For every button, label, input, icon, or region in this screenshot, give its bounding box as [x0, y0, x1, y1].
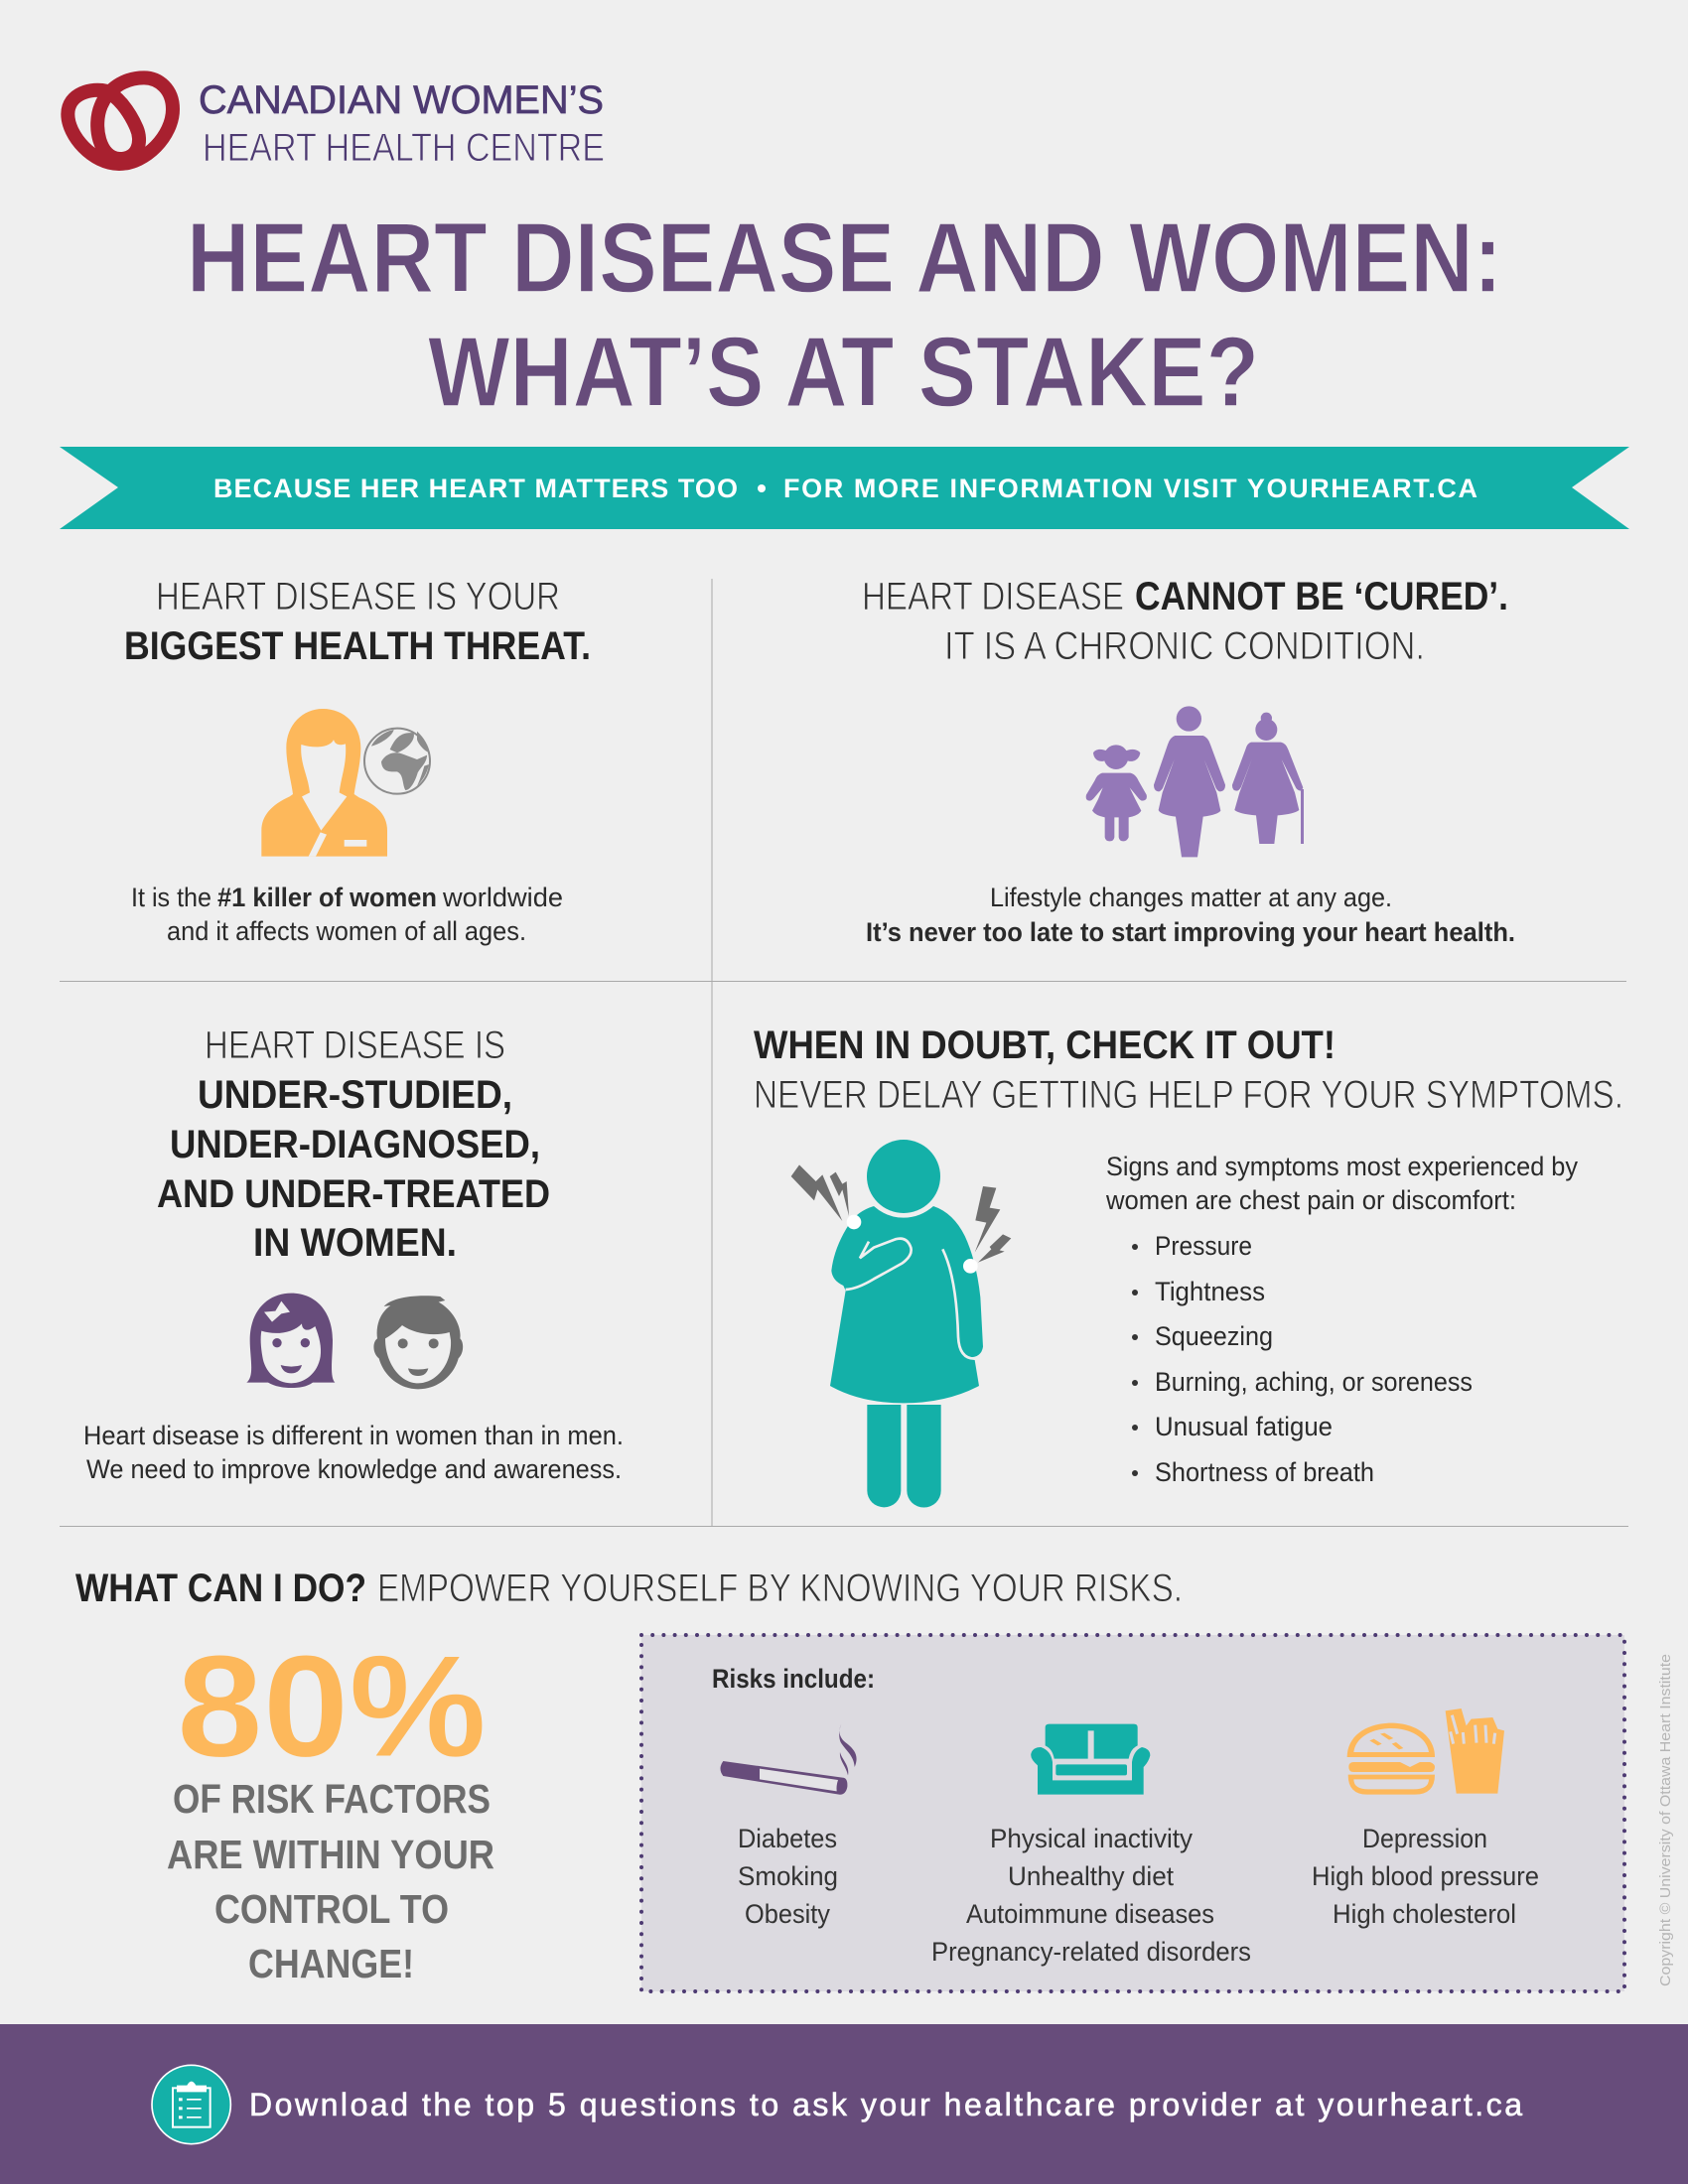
title: HEART DISEASE AND WOMEN:: [187, 203, 1502, 314]
heading: CANNOT BE ‘CURED’.: [1135, 575, 1508, 618]
body text: Heart disease is different in women than in men.: [83, 1421, 624, 1450]
logo: Canadian Women's Heart Health Centre: [68, 77, 605, 170]
heading: IN WOMEN.: [253, 1221, 457, 1265]
risk list column 1: Obesity: [745, 1899, 830, 1929]
heading: IT IS A CHRONIC CONDITION.: [944, 624, 1425, 668]
symptoms list: [1132, 1231, 1473, 1487]
callout: 80 percent: ARE WITHIN YOUR: [167, 1832, 494, 1877]
icon: woman and globe: [261, 709, 430, 857]
panel: risks include: [641, 1635, 1624, 1991]
logo wordmark: CANADIAN WOMEN’S: [199, 78, 604, 122]
icon: cigarette: [720, 1724, 857, 1795]
ribbon banner: [60, 447, 1629, 529]
heading: [754, 1024, 1623, 1117]
heading: HEART DISEASE IS YOUR: [156, 575, 560, 618]
callout: 80 percent: OF RISK FACTORS: [173, 1776, 491, 1822]
body text: [83, 1421, 624, 1484]
footer text: Download the top 5 questions to ask your healthcare provider at yourheart.ca: [249, 2087, 1522, 2122]
copyright note: Copyright © University of Ottawa Heart Institute: [1657, 1654, 1674, 1986]
icon: sofa: [1031, 1724, 1150, 1795]
symptoms intro: [1105, 1152, 1578, 1215]
risk list column 2: Physical inactivity: [990, 1824, 1193, 1853]
callout: 80 percent: [167, 1625, 494, 1986]
risk list column 1: [738, 1824, 838, 1929]
symptoms list: Squeezing: [1155, 1321, 1273, 1351]
body text: It’s never too late to start improving your heart health.: [866, 917, 1515, 947]
risk list column 3: Depression: [1362, 1824, 1487, 1853]
body text: worldwide: [442, 883, 563, 912]
panel: when in doubt: [754, 1024, 1623, 1507]
panel: biggest health threat: [124, 575, 591, 946]
icon: clipboard: [152, 2065, 230, 2144]
symptoms intro: women are chest pain or discomfort:: [1105, 1185, 1516, 1215]
body text: and it affects women of all ages.: [167, 916, 526, 946]
heading: [157, 1024, 550, 1265]
icon: girl and boy faces: [246, 1294, 463, 1389]
title: [187, 203, 1502, 428]
body text: We need to improve knowledge and awareness.: [86, 1454, 622, 1484]
footer band: [0, 2024, 1688, 2184]
symptoms list: Unusual fatigue: [1155, 1412, 1333, 1441]
risk list column 3: High cholesterol: [1333, 1899, 1516, 1929]
heading: [862, 575, 1508, 668]
body text: Lifestyle changes matter at any age.: [990, 883, 1392, 912]
symptoms list: Burning, aching, or soreness: [1155, 1367, 1473, 1397]
risk list column 3: High blood pressure: [1312, 1861, 1539, 1891]
risk list column 1: Diabetes: [738, 1824, 837, 1853]
risk list column 2: Autoimmune diseases: [966, 1899, 1214, 1929]
heading: HEART DISEASE: [862, 575, 1124, 618]
body text: It is the: [131, 883, 211, 912]
risk list column 2: Unhealthy diet: [1008, 1861, 1174, 1891]
heading: UNDER-STUDIED,: [198, 1073, 512, 1117]
icon: burger and fries: [1347, 1708, 1504, 1795]
body text: #1 killer of women: [217, 883, 437, 912]
symptoms list: Shortness of breath: [1155, 1457, 1374, 1487]
icon: red heart rings: [68, 77, 173, 164]
risk list column 3: [1312, 1824, 1539, 1929]
symptoms intro: Signs and symptoms most experienced by: [1106, 1152, 1578, 1181]
symptoms list: Tightness: [1155, 1277, 1265, 1306]
heading: AND UNDER-TREATED: [157, 1172, 550, 1216]
symptoms list: Pressure: [1155, 1231, 1252, 1261]
callout: 80 percent: 80%: [177, 1625, 487, 1787]
heading: [124, 575, 591, 668]
panel: under-studied: [83, 1024, 624, 1484]
icon: woman with chest pain: [791, 1140, 1011, 1507]
risk list column 2: [931, 1824, 1251, 1967]
heading: BIGGEST HEALTH THREAT.: [124, 624, 591, 668]
logo wordmark: [199, 78, 605, 170]
ribbon banner: BECAUSE HER HEART MATTERS TOO: [213, 474, 738, 503]
section heading: what can I do: WHAT CAN I DO?: [75, 1567, 366, 1610]
panel: cannot be cured: [862, 575, 1515, 947]
risk list column 1: Smoking: [738, 1861, 838, 1891]
body text: [866, 883, 1515, 947]
section heading: what can I do: EMPOWER YOURSELF BY KNOWING YOUR RISKS.: [377, 1567, 1183, 1610]
icon: girl, woman and grandmother: [1086, 706, 1304, 857]
ribbon banner: FOR MORE INFORMATION VISIT YOURHEART.CA: [783, 474, 1477, 503]
risks heading: Risks include:: [712, 1664, 875, 1694]
logo wordmark: HEART HEALTH CENTRE: [203, 126, 605, 170]
body text: [131, 883, 563, 946]
title: WHAT’S AT STAKE?: [428, 317, 1259, 428]
callout: 80 percent: CONTROL TO: [214, 1886, 449, 1932]
heading: HEART DISEASE IS: [205, 1024, 505, 1067]
risk list column 2: Pregnancy-related disorders: [931, 1937, 1251, 1967]
heading: WHEN IN DOUBT, CHECK IT OUT!: [754, 1024, 1336, 1067]
callout: 80 percent: CHANGE!: [248, 1941, 414, 1986]
heading: UNDER-DIAGNOSED,: [170, 1123, 540, 1166]
section heading: what can I do: [75, 1567, 1183, 1610]
